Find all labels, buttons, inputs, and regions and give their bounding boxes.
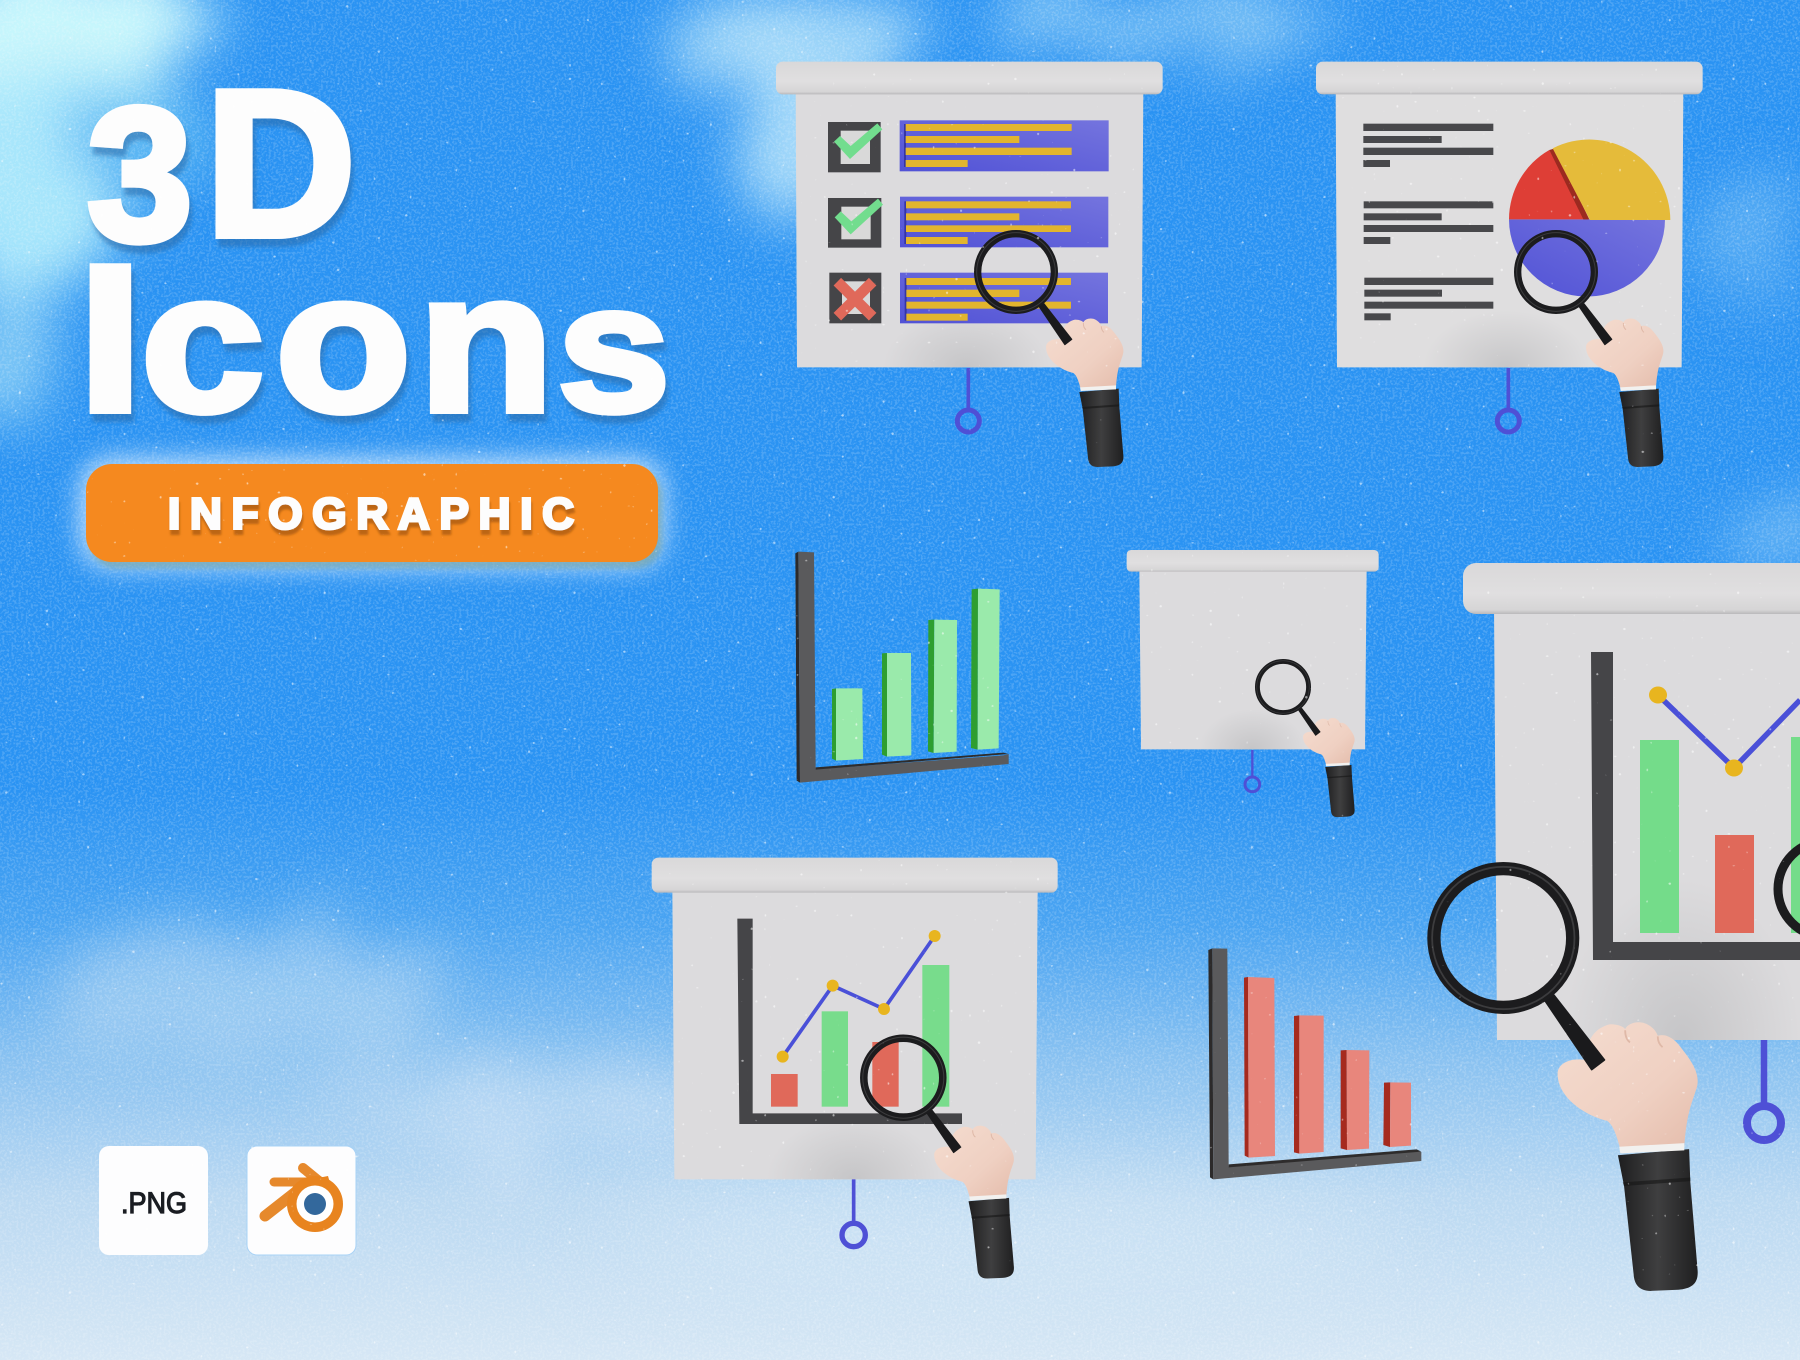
heading line: Icons: s	[558, 248, 670, 449]
icon: second magnifier ring	[1778, 841, 1800, 937]
icon: Blender logo tile	[247, 1146, 356, 1255]
badge label: INFOGRAPHIC	[168, 490, 574, 538]
bars	[1244, 977, 1411, 1158]
screen sheet	[1494, 605, 1800, 1040]
pull cord	[842, 1179, 865, 1247]
panel: pie chart presentation board	[1316, 62, 1703, 432]
pull cord	[957, 368, 979, 432]
icon: .PNG format tile	[99, 1146, 208, 1255]
roller	[652, 858, 1058, 893]
screen sheet	[1336, 90, 1683, 367]
heading line: Icons: I	[78, 222, 143, 456]
bars	[832, 589, 1000, 761]
chart: falling red 3D bars	[1208, 948, 1421, 1179]
heading line: 3D: D	[205, 48, 356, 280]
icon: hand with magnifier on blank board	[1257, 661, 1355, 817]
text lines block 1	[1363, 124, 1493, 167]
text lines block 2	[1364, 201, 1493, 244]
trend line	[1649, 686, 1800, 776]
screen sheet	[1139, 568, 1367, 749]
bars	[771, 965, 949, 1107]
checklist row 3	[829, 273, 1108, 323]
roller	[776, 62, 1163, 94]
icon: hand with magnifier on line chart board	[863, 1037, 1014, 1279]
trend line	[777, 930, 941, 1063]
checklist row 2	[828, 197, 1108, 248]
panel: large cropped chart board	[1463, 563, 1800, 1140]
checklist row 1	[828, 120, 1109, 172]
panel: blank presentation board	[1127, 550, 1379, 792]
heading line: Icons: con	[141, 232, 554, 453]
panel: line and bar chart presentation board	[652, 858, 1058, 1247]
roller	[1316, 62, 1703, 94]
axis	[737, 919, 962, 1124]
roller	[1127, 550, 1379, 572]
screen sheet	[796, 90, 1143, 367]
axis	[1591, 652, 1800, 960]
bars	[1640, 737, 1800, 933]
icon: hand with magnifier on checklist board	[977, 233, 1123, 467]
chart: rising green 3D bars	[795, 552, 1009, 783]
text lines block 3	[1364, 278, 1493, 320]
icon: large hand with magnifier	[1432, 867, 1698, 1291]
panel: checklist presentation board	[776, 62, 1163, 432]
pull cord	[1245, 750, 1260, 792]
pull cord	[1497, 368, 1519, 432]
heading line: 3D: 3	[87, 69, 193, 281]
screen sheet	[672, 888, 1038, 1179]
roller	[1463, 563, 1800, 614]
axis	[1208, 948, 1421, 1179]
badge: INFOGRAPHIC	[80, 458, 664, 568]
title: 3D Icons	[78, 48, 670, 456]
axis	[795, 552, 1009, 783]
icon: .PNG format tile: .PNG	[121, 1187, 187, 1220]
pull cord	[1747, 1040, 1781, 1140]
pie chart	[1509, 140, 1670, 297]
icon: hand with magnifier on pie chart board	[1517, 233, 1663, 467]
